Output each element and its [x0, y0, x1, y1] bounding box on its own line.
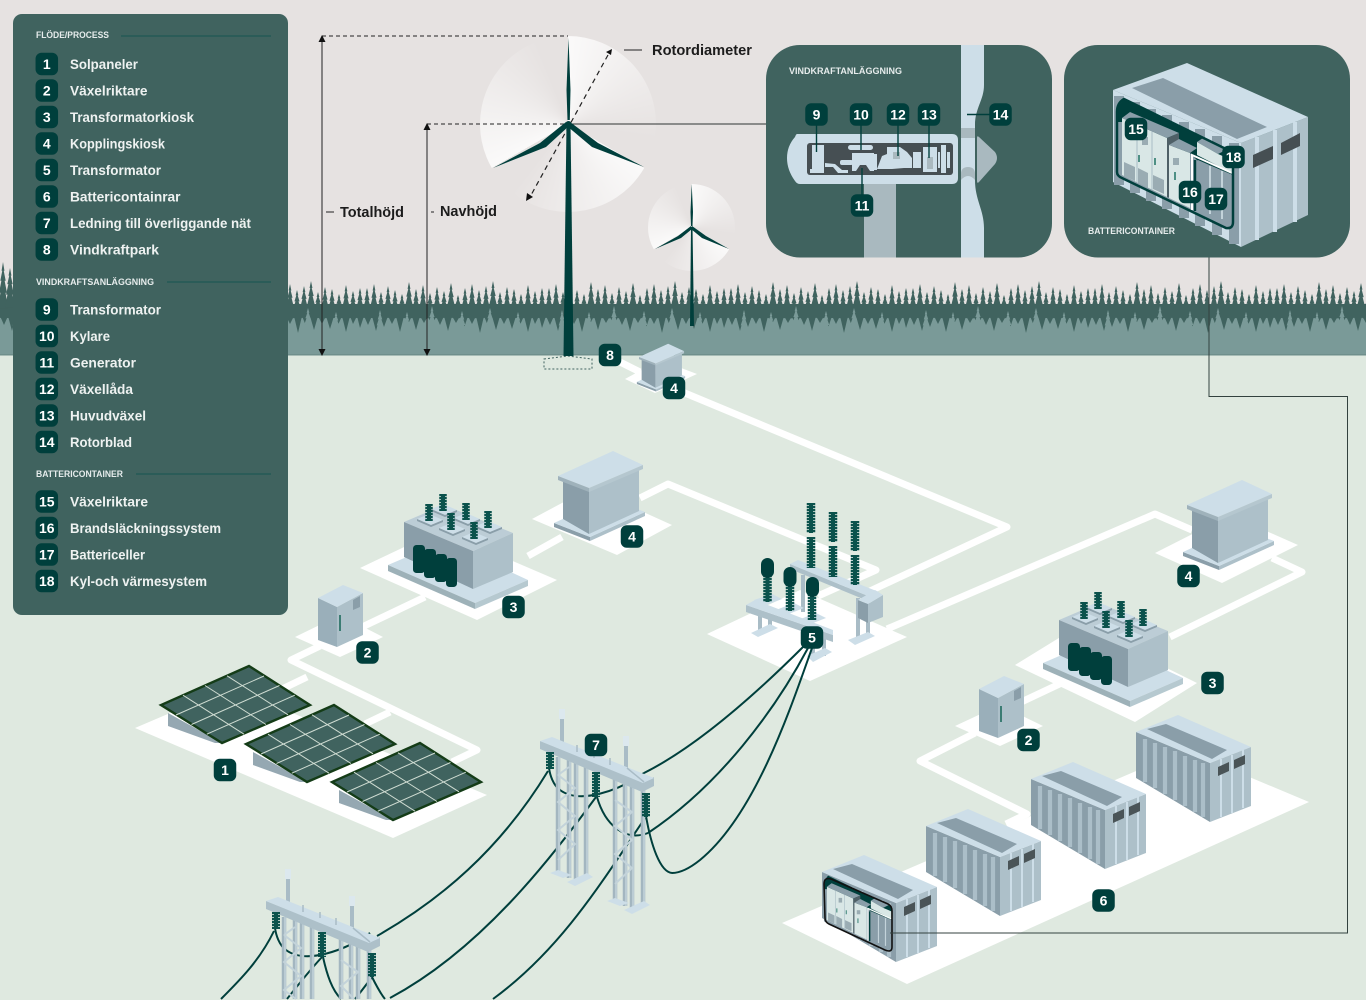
legend item 5: 5 [43, 162, 51, 178]
dimension: Totalhöjd [318, 35, 568, 356]
legend item 14 [36, 431, 132, 453]
dimension: Rotordiameter [526, 42, 752, 201]
legend item 18: Kyl-och värmesystem [70, 573, 207, 589]
legend item 11 [36, 351, 137, 374]
legend heading: Vindkraftsanläggning: VINDKRAFTSANLÄGGNING [36, 277, 154, 287]
badge 16: 16 [1182, 184, 1198, 200]
legend item 17 [36, 543, 146, 566]
badge 17 [1205, 188, 1227, 210]
panel: wind turbine nacelle [766, 45, 1052, 258]
legend item 11: Generator [70, 354, 137, 370]
badge 14 [989, 103, 1012, 126]
legend item 10 [36, 325, 110, 347]
legend item 15: 15 [39, 494, 55, 510]
legend item 3 [36, 106, 194, 128]
legend item 15: Växelriktare [70, 494, 148, 510]
legend item 16: Brandsläckningssystem [70, 520, 221, 536]
dimension: Navhöjd: Navhöjd [440, 203, 497, 220]
legend item 10: 10 [39, 328, 55, 344]
switching kiosk right [1183, 480, 1274, 570]
large container [1113, 63, 1308, 247]
white site pads and cable routes [135, 360, 1309, 984]
badge 9: 9 [813, 106, 821, 122]
badge 12: 12 [890, 106, 906, 122]
badge 4 right [1177, 565, 1200, 587]
badge 2 right: 2 [1025, 732, 1033, 748]
legend item 7: 7 [43, 215, 51, 231]
legend item 9 [36, 298, 162, 321]
badge 1: 1 [221, 762, 229, 778]
badge 6: 6 [1100, 892, 1108, 908]
legend item 15 [36, 490, 148, 513]
badge 17: 17 [1208, 191, 1224, 207]
badge 3 right [1201, 672, 1224, 694]
legend item 4: Kopplingskiosk [70, 136, 165, 152]
legend item 18: 18 [39, 573, 55, 589]
leader lines [816, 114, 1000, 205]
badge 15: 15 [1128, 121, 1144, 137]
badge 15 [1125, 118, 1147, 140]
switching kiosk middle [554, 451, 645, 541]
legend item 6: Battericontainrar [70, 188, 181, 204]
legend item 1: Solpaneler [70, 56, 139, 72]
badge 5 [801, 626, 823, 649]
inverter right [979, 676, 1024, 738]
badge 14: 14 [993, 106, 1008, 122]
badge 11 [851, 194, 873, 217]
legend item 7: Ledning till överliggande nät [70, 215, 251, 231]
inverter left [318, 585, 363, 647]
solar panel 3 [332, 743, 481, 820]
badge 2 left: 2 [364, 644, 372, 660]
legend item 17: 17 [39, 546, 55, 562]
legend item 5 [36, 159, 162, 181]
badge 3 left: 3 [510, 599, 518, 615]
legend item 3: Transformatorkiosk [70, 109, 194, 125]
badge 3 right: 3 [1209, 675, 1217, 691]
badge 4 wind park [663, 377, 685, 399]
badge 7: 7 [592, 737, 600, 753]
legend item 12 [36, 378, 133, 400]
badge 2 right [1017, 729, 1040, 751]
tall insulators [811, 503, 855, 585]
badge 12 [887, 103, 909, 126]
legend item 4 [36, 132, 165, 155]
switching kiosk at wind park [637, 344, 685, 391]
pylon upper [540, 709, 654, 914]
foundation outline [544, 356, 592, 369]
badge 4 right: 4 [1185, 568, 1193, 584]
badge 10: 10 [853, 106, 869, 122]
dimension: Totalhöjd: Totalhöjd [340, 204, 404, 221]
panel: battery container [1064, 45, 1350, 258]
ground [0, 356, 1366, 1000]
front frame [746, 594, 833, 662]
legend item 11: 11 [39, 354, 54, 370]
legend panel [13, 14, 288, 615]
badge 2 left [356, 641, 379, 664]
legend item 12: 12 [39, 381, 55, 397]
legend item 4: 4 [43, 136, 51, 152]
dimension: Rotordiameter: Rotordiameter [652, 42, 752, 59]
legend item 2 [36, 79, 148, 102]
dimension: Navhöjd [424, 123, 566, 356]
legend item 9: Transformator [70, 302, 162, 318]
rear frame [790, 560, 883, 645]
badge 8 wind park: 8 [606, 347, 614, 363]
legend item 16: 16 [39, 520, 55, 536]
large wind turbine [493, 38, 644, 356]
legend item 1: 1 [43, 56, 51, 72]
leader: hub to nacelle panel [568, 123, 766, 125]
legend item 12: Växellåda [70, 381, 133, 397]
panel label: Vindkraftanläggning: VINDKRAFTANLÄGGNING [789, 66, 902, 76]
legend item 5: Transformator [70, 162, 162, 178]
badge 8 wind park [599, 344, 621, 366]
badge 11: 11 [855, 198, 870, 214]
main transformer station [746, 503, 883, 662]
legend heading: Flöde/process: FLÖDE/PROCESS [36, 30, 109, 40]
rotor disc: small turbine [648, 184, 735, 271]
legend item 2: Växelriktare [70, 82, 148, 98]
solar panel 2 [246, 705, 395, 782]
badge 7 [585, 734, 607, 756]
battery containers [822, 715, 1251, 962]
rotor disc: large turbine [480, 36, 656, 212]
legend item 7 [36, 212, 251, 234]
small wind turbine [655, 184, 729, 326]
badge 9 [805, 103, 828, 126]
legend item 6: 6 [43, 188, 51, 204]
badge 10 [850, 103, 872, 126]
power lines [221, 645, 812, 999]
legend heading: Battericontainer: BATTERICONTAINER [36, 469, 123, 479]
legend item 17: Battericeller [70, 546, 146, 562]
badge 4 middle: 4 [628, 528, 636, 544]
solar panels [161, 666, 481, 820]
transformer kiosk right [1043, 592, 1183, 707]
legend item 10: Kylare [70, 328, 110, 344]
tower section [864, 184, 896, 258]
legend item 14: 14 [39, 434, 55, 450]
legend item 8 [36, 238, 159, 261]
leader: container to battery panel [890, 257, 1348, 933]
badge 13 [918, 103, 940, 126]
solar panel 1 [161, 666, 310, 743]
badge 3 left [502, 596, 525, 618]
badge 5: 5 [808, 630, 816, 646]
badge 18: 18 [1226, 149, 1241, 165]
legend item 1 [36, 53, 139, 75]
bushing insulators [761, 558, 819, 620]
legend item 8: Vindkraftpark [70, 242, 159, 258]
legend item 13: 13 [39, 408, 55, 424]
legend item 16 [36, 517, 221, 539]
panel label: Battericontainer: BATTERICONTAINER [1088, 226, 1175, 236]
badge 4 wind park: 4 [670, 380, 678, 396]
pylon lower [266, 869, 380, 999]
hub nose cone [977, 136, 997, 183]
badge 4 middle [621, 525, 643, 548]
legend item 9: 9 [43, 302, 51, 318]
badge 1 [214, 759, 236, 781]
legend item 2: 2 [43, 82, 51, 98]
nacelle [787, 134, 958, 184]
legend item 14: Rotorblad [70, 434, 132, 450]
badge 6 [1092, 889, 1115, 912]
transformer kiosk left [388, 494, 528, 609]
badge 18 [1222, 146, 1245, 168]
legend item 6 [36, 185, 181, 208]
legend item 13: Huvudväxel [70, 408, 146, 424]
badge 16 [1179, 181, 1201, 203]
rotor blade [961, 45, 984, 258]
legend item 13 [36, 404, 146, 427]
legend item 3: 3 [43, 109, 51, 125]
legend item 8: 8 [43, 242, 51, 258]
badge 13: 13 [921, 106, 937, 122]
forest backdrop [0, 262, 1366, 356]
legend item 18 [36, 570, 207, 592]
